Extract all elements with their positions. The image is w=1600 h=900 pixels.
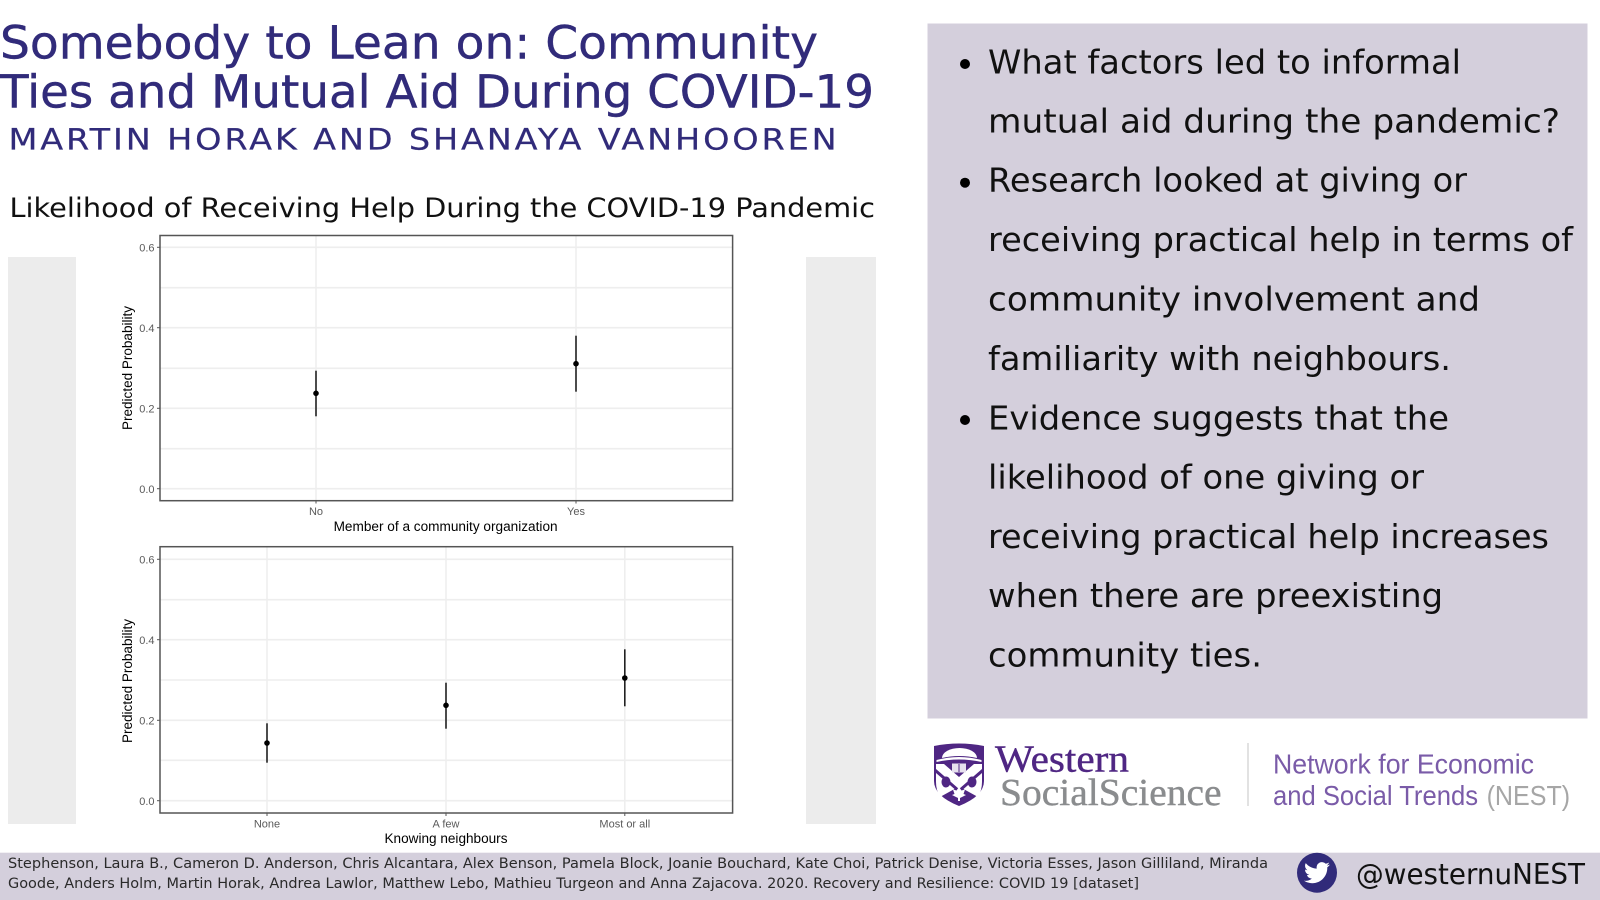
x tick labels — [309, 506, 585, 518]
footer band — [0, 853, 1600, 900]
bullet 1 — [960, 42, 1560, 141]
x tick labels: No — [309, 506, 323, 518]
x tick labels: Yes — [567, 506, 585, 518]
wordmark — [995, 738, 1222, 814]
y tick labels: 0.2 — [139, 404, 154, 416]
y axis title: Predicted Probability — [120, 619, 135, 743]
y tick labels: 0.0 — [139, 796, 154, 808]
y tick labels: 0.4 — [139, 323, 154, 335]
x axis title: Knowing neighbours — [384, 831, 508, 846]
citation: Goode, Anders Holm, Martin Horak, Andrea Lawlor, Matthew Lebo, Mathieu Turgeon and Anna Zajacova. 2020. Recovery and Resilience: COVID 19 [dataset] — [8, 876, 1139, 892]
side band: left — [8, 257, 76, 824]
bullet 2: Research looked at giving or — [988, 161, 1467, 200]
x tick labels: Most or all — [599, 818, 650, 830]
citation: Stephenson, Laura B., Cameron D. Anderson, Chris Alcantara, Alex Benson, Pamela Block, Joanie Bouchard, Kate Choi, Patrick Denise, Victoria Esses, Jason Gilliland, Miranda — [8, 856, 1268, 872]
bullet 2: community involvement and — [988, 280, 1480, 319]
y tick labels — [139, 554, 154, 808]
point: None — [264, 723, 270, 763]
bullet 2: familiarity with neighbours. — [988, 339, 1451, 378]
logo: NEST — [1248, 743, 1570, 811]
y axis title: Predicted Probability — [120, 306, 135, 430]
logo: NEST: and Social Trends — [1273, 780, 1478, 811]
logo: Western Social Science — [934, 738, 1222, 814]
wordmark: SocialScience — [1000, 772, 1222, 814]
bullet 3: Evidence suggests that the — [988, 398, 1449, 437]
title: Somebody to Lean on: Community — [0, 16, 818, 70]
bullet 2: receiving practical help in terms of — [988, 220, 1574, 259]
bullet 1: mutual aid during the pandemic? — [988, 102, 1560, 141]
authors: MARTIN HORAK AND SHANAYA VANHOOREN — [8, 122, 840, 156]
point: Most or all — [622, 649, 628, 706]
side band: right — [806, 257, 876, 824]
y tick labels: 0.2 — [139, 716, 154, 728]
twitter handle: @westernuNEST — [1356, 858, 1586, 891]
citation — [8, 856, 1268, 892]
logo: NEST: Network for Economic — [1273, 748, 1534, 779]
title: Ties and Mutual Aid During COVID-19 — [0, 66, 874, 118]
bullet 3: receiving practical help increases — [988, 517, 1549, 556]
x tick labels: None — [254, 818, 280, 830]
icon: shield — [934, 744, 984, 806]
bullet 1: What factors led to informal — [988, 42, 1461, 81]
chart: member of a community organization — [120, 236, 733, 534]
icon: twitter — [1297, 853, 1337, 893]
y tick labels: 0.4 — [139, 635, 154, 647]
point: Yes — [573, 336, 579, 392]
point: A few — [443, 683, 449, 729]
x tick labels: A few — [433, 818, 460, 830]
bullet 3: likelihood of one giving or — [988, 458, 1424, 497]
x tick labels — [254, 818, 650, 830]
title — [0, 16, 874, 118]
logo: NEST: (NEST) — [1487, 780, 1570, 811]
chart: knowing neighbours — [120, 547, 733, 846]
panel: key findings — [928, 24, 1588, 718]
point: No — [313, 371, 319, 416]
bullet 2 — [960, 161, 1574, 378]
bullet 3: community ties. — [988, 636, 1262, 674]
y tick labels — [139, 242, 154, 496]
y tick labels: 0.0 — [139, 484, 154, 496]
wordmark: Western — [995, 738, 1129, 780]
y tick labels: 0.6 — [139, 554, 154, 566]
y tick labels: 0.6 — [139, 242, 154, 254]
x axis title: Member of a community organization — [334, 519, 558, 534]
bullet 3: when there are preexisting — [988, 576, 1443, 615]
bullet 3 — [960, 398, 1549, 674]
chart heading: Likelihood of Receiving Help During the COVID-19 Pandemic — [10, 193, 875, 224]
